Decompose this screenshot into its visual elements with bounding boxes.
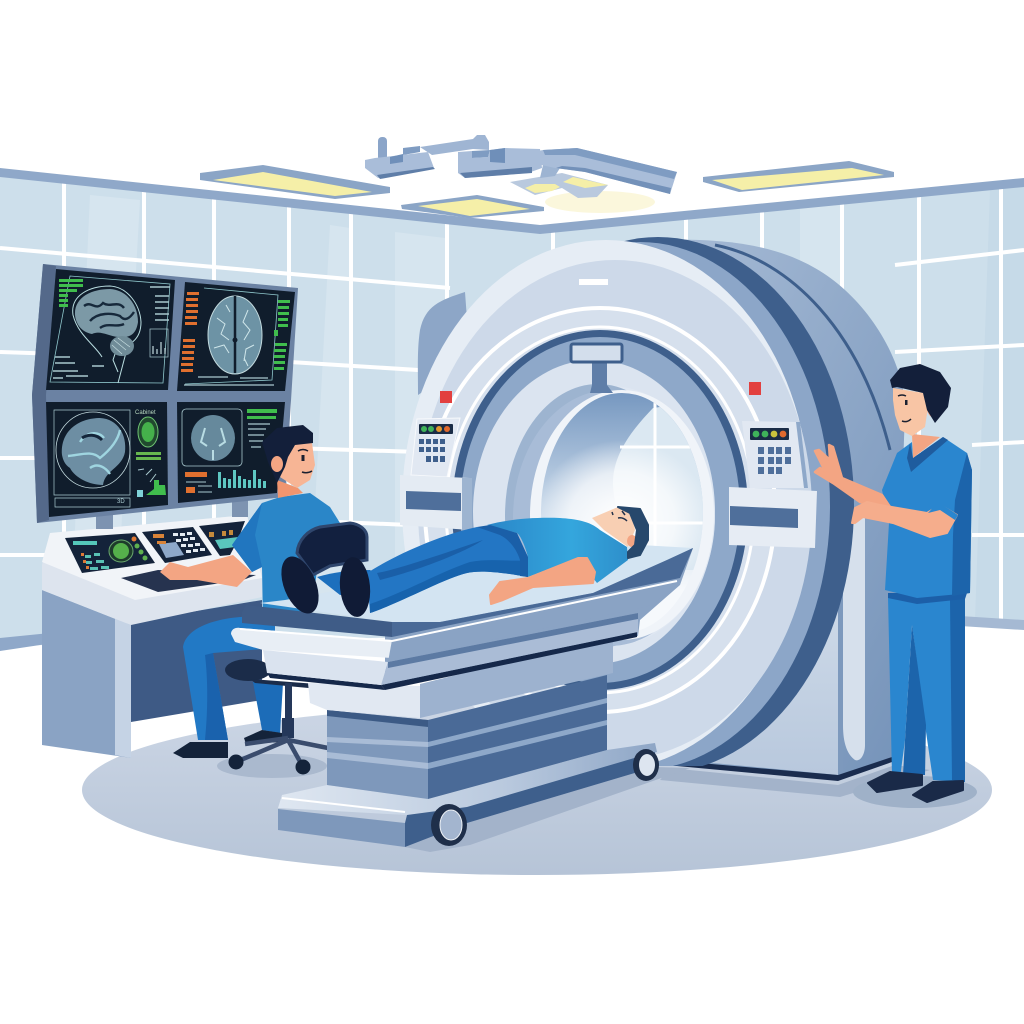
patient belt (477, 525, 528, 577)
mattress (242, 545, 693, 637)
standing technician (815, 364, 977, 808)
patient table (231, 545, 693, 847)
table wheel small (633, 749, 659, 781)
patient neck and face (592, 507, 635, 547)
pedestal (327, 675, 607, 799)
bore rings (452, 330, 748, 690)
patient ear (627, 535, 637, 547)
screen bottom right: brain and bar chart (177, 402, 285, 503)
table base (278, 743, 657, 847)
left scanner bracket (400, 475, 472, 530)
floor platform (82, 705, 992, 875)
red indicator right (749, 382, 761, 395)
monitor frame (32, 264, 298, 523)
technician shadow (853, 776, 977, 808)
patient arm (490, 558, 595, 604)
technician shoes (868, 772, 922, 792)
floor shadow under scanner (660, 765, 930, 797)
knee support (297, 523, 367, 575)
monitor stands (96, 500, 248, 529)
operator face (280, 443, 315, 488)
MRI scanner (400, 237, 905, 781)
right control panel (742, 421, 808, 488)
operator shoe back (244, 730, 282, 744)
screen top left: sagittal brain (46, 269, 175, 390)
screen bottom left: brain (46, 402, 168, 517)
floor shadow under table (405, 767, 690, 852)
table slab (231, 548, 693, 690)
red indicator left (440, 391, 452, 403)
patient hair (618, 507, 648, 558)
desk panel keypad (142, 527, 212, 563)
operator back leg (253, 682, 283, 733)
patient left boot (274, 551, 326, 619)
seated operator (160, 425, 340, 758)
desk panel right (199, 521, 245, 556)
technician trousers (888, 595, 965, 782)
technician lower arm (852, 502, 957, 537)
table wheel large (431, 804, 467, 846)
rear left bulge (418, 292, 470, 395)
patient near shirt (487, 518, 628, 583)
technician ear (927, 399, 939, 417)
patient eye (612, 511, 627, 521)
patient far leg (317, 570, 400, 595)
operator torso (232, 493, 340, 620)
technician shirt (882, 437, 972, 598)
front face (402, 240, 810, 770)
scanner rings clipped at floor (402, 237, 854, 773)
patient right boot (337, 556, 373, 618)
ceiling surgical lamp arm (365, 135, 677, 213)
technician sleeve (928, 502, 958, 520)
technician collar (907, 437, 948, 472)
operator shoe front (173, 742, 228, 758)
bore top display (571, 344, 622, 393)
pedestal upper (308, 636, 613, 718)
wall with tile grid (0, 168, 1024, 651)
left control panel (411, 418, 460, 477)
patient (274, 507, 648, 619)
operator arm (160, 555, 252, 587)
monitor wall (32, 264, 298, 523)
screen top right: axial brain (177, 282, 295, 391)
patient trousers (367, 527, 528, 613)
technician hair (890, 364, 951, 423)
scanner rear housing (640, 240, 905, 778)
technician neck (912, 434, 940, 458)
dark outer band (624, 237, 854, 766)
operator ear (271, 456, 283, 472)
screen bottom left: brain: 3D (117, 499, 125, 505)
operator eye and smile (298, 450, 312, 473)
stool (225, 659, 330, 774)
technician face (893, 388, 928, 436)
operator neck (277, 480, 303, 498)
operator desk (42, 500, 262, 758)
technician upper arm (815, 445, 890, 508)
right scanner bracket (729, 487, 817, 548)
screen bottom left: brain: Cabinet (135, 410, 156, 416)
base cabinet (650, 510, 892, 781)
operator front leg (183, 615, 275, 740)
operator hair (262, 425, 313, 483)
technician eye and smile (898, 395, 911, 422)
floor shadow under stool (217, 754, 327, 778)
tunnel interior with window view (541, 393, 703, 570)
ceiling light panels (200, 161, 894, 218)
keyboard (121, 570, 256, 592)
desk panel left (65, 533, 155, 573)
